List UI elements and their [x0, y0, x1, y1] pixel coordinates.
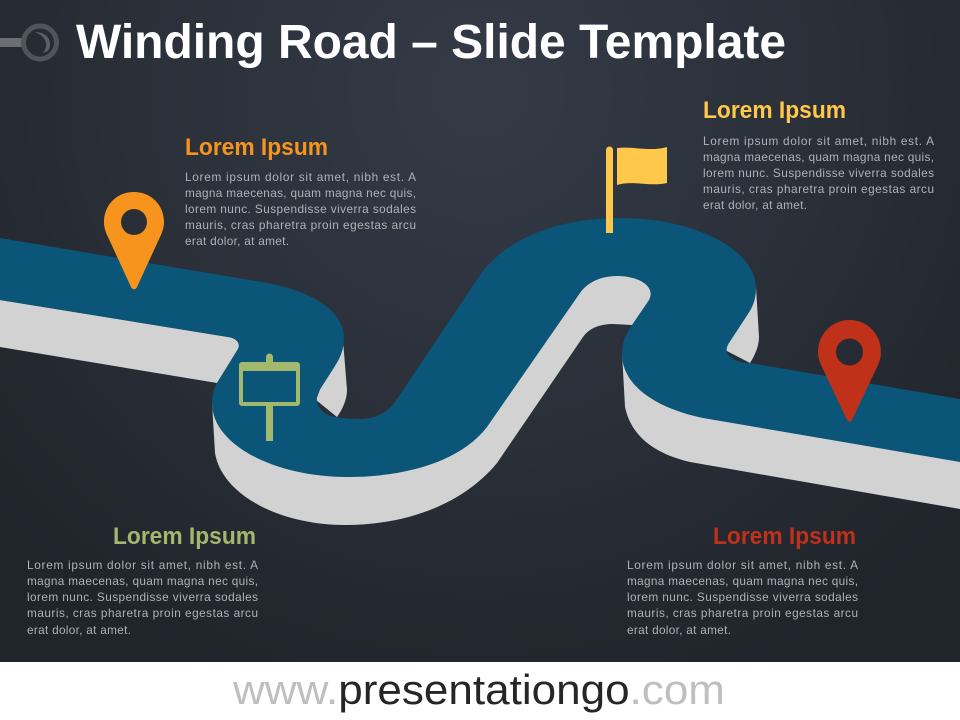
text block: green: Lorem ipsum dolor sit amet, nibh est. A: [27, 558, 258, 572]
text block: yellow: Lorem Ipsum: [703, 97, 846, 124]
text block: orange: Lorem ipsum dolor sit amet, nibh est. A: [185, 170, 416, 184]
icon: orange map pin: [104, 192, 164, 289]
text block: orange: [185, 134, 416, 248]
text block: green: erat dolor, at amet.: [27, 623, 131, 637]
text block: yellow: lorem nunc. Suspendisse viverra sodales: [703, 166, 934, 180]
text block: red: Lorem Ipsum: [713, 523, 856, 550]
text block: orange: lorem nunc. Suspendisse viverra sodales: [185, 202, 416, 216]
text block: yellow: mauris, cras pharetra proin egestas arcu: [703, 182, 934, 196]
text block: green: magna maecenas, quam magna nec quis,: [27, 574, 258, 588]
text block: orange: erat dolor, at amet.: [185, 234, 289, 248]
text block: red: erat dolor, at amet.: [627, 623, 731, 637]
text block: green: [27, 523, 258, 637]
text block: green: Lorem Ipsum: [113, 523, 256, 550]
text block: orange: Lorem Ipsum: [185, 134, 328, 161]
text block: green: mauris, cras pharetra proin egestas arcu: [27, 606, 258, 620]
winding road: [0, 218, 960, 525]
footer url: www.presentationgo .com: [232, 666, 725, 713]
text block: yellow: [703, 97, 934, 212]
icon: yellow flag: [606, 146, 667, 233]
text block: red: [627, 523, 858, 637]
footer band: [0, 662, 960, 720]
text block: orange: mauris, cras pharetra proin egestas arcu: [185, 218, 416, 232]
text block: red: Lorem ipsum dolor sit amet, nibh est. A: [627, 558, 858, 572]
text block: red: mauris, cras pharetra proin egestas arcu: [627, 606, 858, 620]
road side faces: [0, 270, 960, 525]
text block: red: magna maecenas, quam magna nec quis,: [627, 574, 858, 588]
road top surface: [0, 218, 960, 477]
text block: yellow: magna maecenas, quam magna nec quis,: [703, 150, 934, 164]
title: Winding Road – Slide Template: [76, 16, 786, 69]
text block: yellow: erat dolor, at amet.: [703, 198, 807, 212]
text block: orange: magna maecenas, quam magna nec quis,: [185, 186, 416, 200]
icon: green signpost: [239, 354, 300, 441]
text block: green: lorem nunc. Suspendisse viverra sodales: [27, 590, 258, 604]
text block: red: lorem nunc. Suspendisse viverra sodales: [627, 590, 858, 604]
icon: red map pin: [818, 320, 881, 422]
text block: yellow: Lorem ipsum dolor sit amet, nibh est. A: [703, 134, 934, 148]
logo icon: [0, 26, 56, 59]
